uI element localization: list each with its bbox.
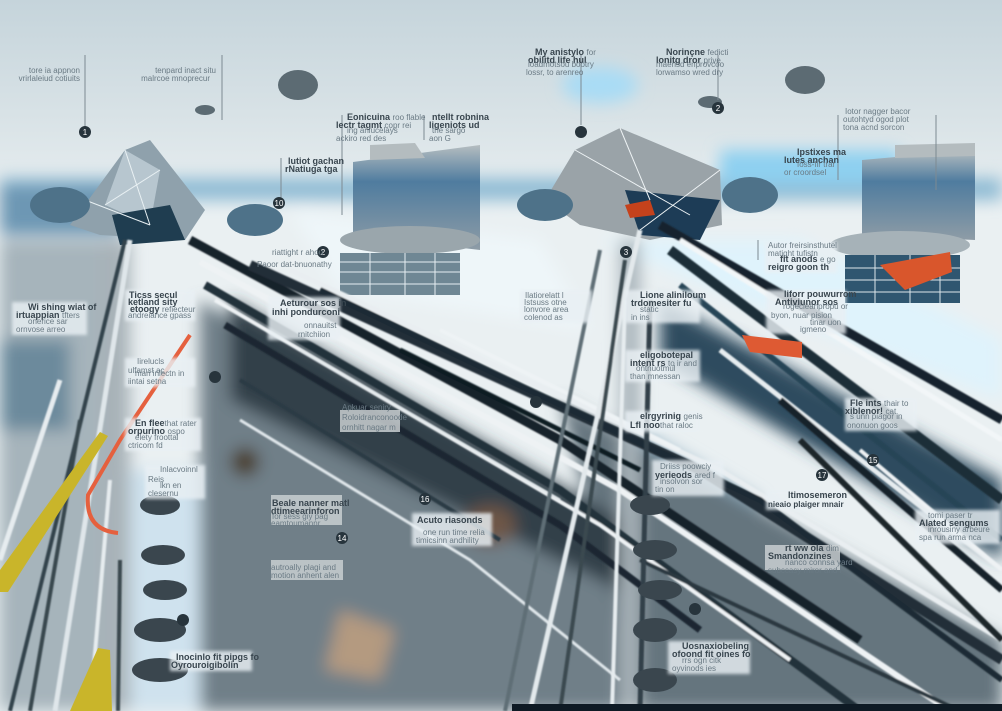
- callout text: riattight r ahou: [272, 248, 323, 257]
- callout text: ntellt robnina: [432, 112, 490, 122]
- number badges: 3: [624, 248, 629, 257]
- callout text: Wi shing wiat of: [28, 302, 97, 312]
- callout text: timicsinn andhility: [416, 536, 479, 545]
- callout text: Istsuss otne: [524, 298, 567, 307]
- callout text: Fle ints thair to: [850, 398, 909, 408]
- callout text: ligeniots ud: [429, 120, 480, 130]
- callout text: ornhitt nagar m: [342, 423, 396, 432]
- number badges: 1: [83, 128, 88, 137]
- callout text: lkn en: [160, 481, 181, 490]
- callout text: inhi pondurconi: [272, 307, 340, 317]
- callout text: onnauitst: [304, 321, 337, 330]
- callout text: rNatiuga tga: [285, 164, 339, 174]
- pale text backing patches: [12, 242, 1000, 674]
- callout text: one run time relia: [423, 528, 485, 537]
- callout text: subccasy miror and i: [768, 566, 842, 575]
- number badges: 14: [338, 534, 347, 543]
- callout text: Alated sengums: [919, 518, 989, 528]
- callout text: yerieods ared f: [655, 470, 716, 480]
- callout text: motion anhent alen: [271, 571, 339, 580]
- callout text: Norinçne fedicti: [666, 47, 729, 57]
- callout text: maerisd enprovcoo: [656, 60, 725, 69]
- callout text: byon, nuar pision: [771, 311, 832, 320]
- callout text: En fleethat rater: [135, 418, 197, 428]
- callout text: than mnessan: [630, 372, 680, 381]
- callout text: Ticss secul: [129, 290, 177, 300]
- callout text: oyvinods ies: [672, 664, 716, 673]
- callout text: onerice sar: [28, 317, 68, 326]
- number badges: 2: [321, 248, 326, 257]
- callout text: My anistylo for: [535, 47, 596, 57]
- callout text: the sargo: [432, 126, 466, 135]
- center faceted mountain: [545, 128, 722, 240]
- callout text: Autor freirsinsthutel: [768, 241, 837, 250]
- callout text: lonitg dror prive: [656, 55, 721, 65]
- callout text: insolvon sor: [660, 477, 703, 486]
- callout text: Beale nanner matl: [272, 498, 350, 508]
- flying drones: [195, 66, 825, 115]
- callout text: tore ia appnon: [29, 66, 80, 75]
- callout text: liforr pouwurrom: [784, 289, 856, 299]
- callout text: Aeturour sos in: [280, 298, 347, 308]
- callout text: Lfl noothat raloc: [630, 420, 693, 430]
- callout text: rrs ogn citk: [682, 656, 722, 665]
- callout text: Ilatiorelatt l: [525, 291, 564, 300]
- callout text: Oyrouroigibolin: [171, 660, 238, 670]
- callout text: loadmotsou bootry: [528, 60, 594, 69]
- callout text: rt ww ola dim: [785, 543, 839, 553]
- number badges: 10: [275, 199, 284, 208]
- number badges: [79, 102, 879, 626]
- callout text: s unn piagor in: [850, 412, 902, 421]
- callout text: Uosnaxiobeling: [682, 641, 749, 651]
- callout text: ulfamst ac: [128, 366, 164, 375]
- callout text: nieaio plaiger mnair: [768, 500, 844, 509]
- callout text: intent rs to ir and: [630, 358, 697, 368]
- main road stripes: [190, 240, 1002, 711]
- callout text: ctricom fd: [128, 441, 163, 450]
- callout text: eamtoumannr: [271, 519, 321, 528]
- callout text: ing anlucelays: [347, 126, 398, 135]
- callout text: igmeno: [800, 325, 827, 334]
- orange vehicle: [742, 335, 802, 358]
- callout text: Reis: [148, 475, 164, 484]
- callout text: Smandonzines: [768, 551, 832, 561]
- trees: [30, 177, 778, 236]
- callout text: Inocinlo fit pipgs fo: [176, 652, 259, 662]
- right vertical road: [505, 230, 650, 711]
- callout text: etoogy refiecteur: [130, 304, 196, 314]
- orange route line: [88, 335, 190, 533]
- callout text: andreiance gpass: [128, 311, 191, 320]
- callout text: Inlacvoinnl: [160, 465, 198, 474]
- callout text: Lione aliniloum: [640, 290, 706, 300]
- callout text: ornvose arreo: [16, 325, 66, 334]
- right road stripes: [660, 225, 1002, 640]
- callout text: orpurino ospo: [128, 426, 185, 436]
- callout text: matight tufistn: [768, 249, 818, 258]
- yellow road line: [0, 432, 112, 711]
- callout text: dtimeearinforon: [271, 506, 340, 516]
- callout text: tona acnd sorcon: [843, 123, 904, 132]
- callout text: nanco connsa yard: [785, 558, 853, 567]
- bottom edge strip: [512, 704, 1002, 711]
- callout text: colenod as: [524, 313, 563, 322]
- callout text: ltimosemeron: [788, 490, 847, 500]
- callout text: Iotor nagger bacor: [845, 107, 911, 116]
- callout text: Roloidranconoode: [342, 413, 407, 422]
- callout text: lossr, to arenreo: [526, 68, 584, 77]
- callout text: man inlectn in: [135, 369, 184, 378]
- callout text: Antiviunor sos: [775, 297, 838, 307]
- callout text: tin on: [655, 485, 675, 494]
- left road stripes: [0, 240, 130, 711]
- callout text: inrousiny arbeure: [928, 525, 990, 534]
- callout text: obilitd life hul: [528, 55, 586, 65]
- right glass building: [830, 143, 975, 303]
- callout text: ontnuotmul: [636, 364, 676, 373]
- callout text: vrirlaleiud cotiuits: [19, 74, 80, 83]
- callout text: or croordsel: [784, 168, 826, 177]
- callout text: lorwamso wred dry: [656, 68, 723, 77]
- callout text: clesernu: [148, 489, 178, 498]
- callout text: elrgyrinig genis: [640, 411, 703, 421]
- callout text: lutiot gachan: [288, 156, 344, 166]
- callout text: ketland sity: [128, 297, 178, 307]
- callout text: Ipstixes ma: [797, 147, 847, 157]
- callout text: elety froottal: [135, 433, 179, 442]
- number badges: 17: [818, 471, 827, 480]
- callout text: lectr tagmt copr rei: [336, 120, 411, 130]
- callout text: aon G: [429, 134, 451, 143]
- callout text: spa run arma nca: [919, 533, 982, 542]
- callout text: outohtyd ogod plot: [843, 115, 910, 124]
- callout text: Driiss poowciy: [660, 462, 711, 471]
- callout text: in ins: [631, 313, 650, 322]
- callout text: rnitchiion: [298, 330, 330, 339]
- callout text: tenpard inact situ: [155, 66, 216, 75]
- greyed label panels: [271, 410, 840, 580]
- callout text: Iirelucls: [137, 357, 164, 366]
- callout text: eligobotepal: [640, 350, 693, 360]
- callout text: lutes anchan: [784, 155, 839, 165]
- left faceted mountain: [70, 140, 205, 245]
- callout leader lines: [85, 55, 936, 260]
- callout text: Acuto riasonds: [417, 515, 483, 525]
- number badges: 16: [421, 495, 430, 504]
- callout text: fit anods e go: [780, 254, 836, 264]
- callout text: ononuon goos: [847, 421, 898, 430]
- callout text: autroally plagi and: [271, 563, 336, 572]
- center glass building: [340, 143, 480, 295]
- callout text: for sess giy pag: [272, 512, 328, 521]
- callout text: rogecleanpropu or: [783, 302, 848, 311]
- callout text: Apkuar seniry: [342, 403, 391, 412]
- callout text: trdomesiter fu: [631, 298, 692, 308]
- callout text: iintai setna: [128, 377, 167, 386]
- callout text: reigro goon th: [768, 262, 829, 272]
- callout text: tinar uon: [810, 318, 841, 327]
- callout text: xiblenor! cat: [845, 406, 897, 416]
- callout text: ackiro red des: [336, 134, 386, 143]
- callout text: malrcoe mnoprecur: [141, 74, 210, 83]
- number badges: 2: [716, 104, 721, 113]
- callout text: lonvore area: [524, 305, 569, 314]
- callout text: foss-fir trar: [797, 160, 836, 169]
- number badges: 15: [869, 456, 878, 465]
- dark pods columns: [132, 495, 682, 692]
- callout text: irtuappian tfters: [16, 310, 80, 320]
- callout text: tomi paser tr: [928, 511, 973, 520]
- callout text: Eonicuina roo flable: [347, 112, 426, 122]
- callout text: ofoond fit oines fo: [672, 649, 751, 659]
- callout text: Paoor dat-bnuonathy: [257, 260, 332, 269]
- callout text: static: [640, 305, 659, 314]
